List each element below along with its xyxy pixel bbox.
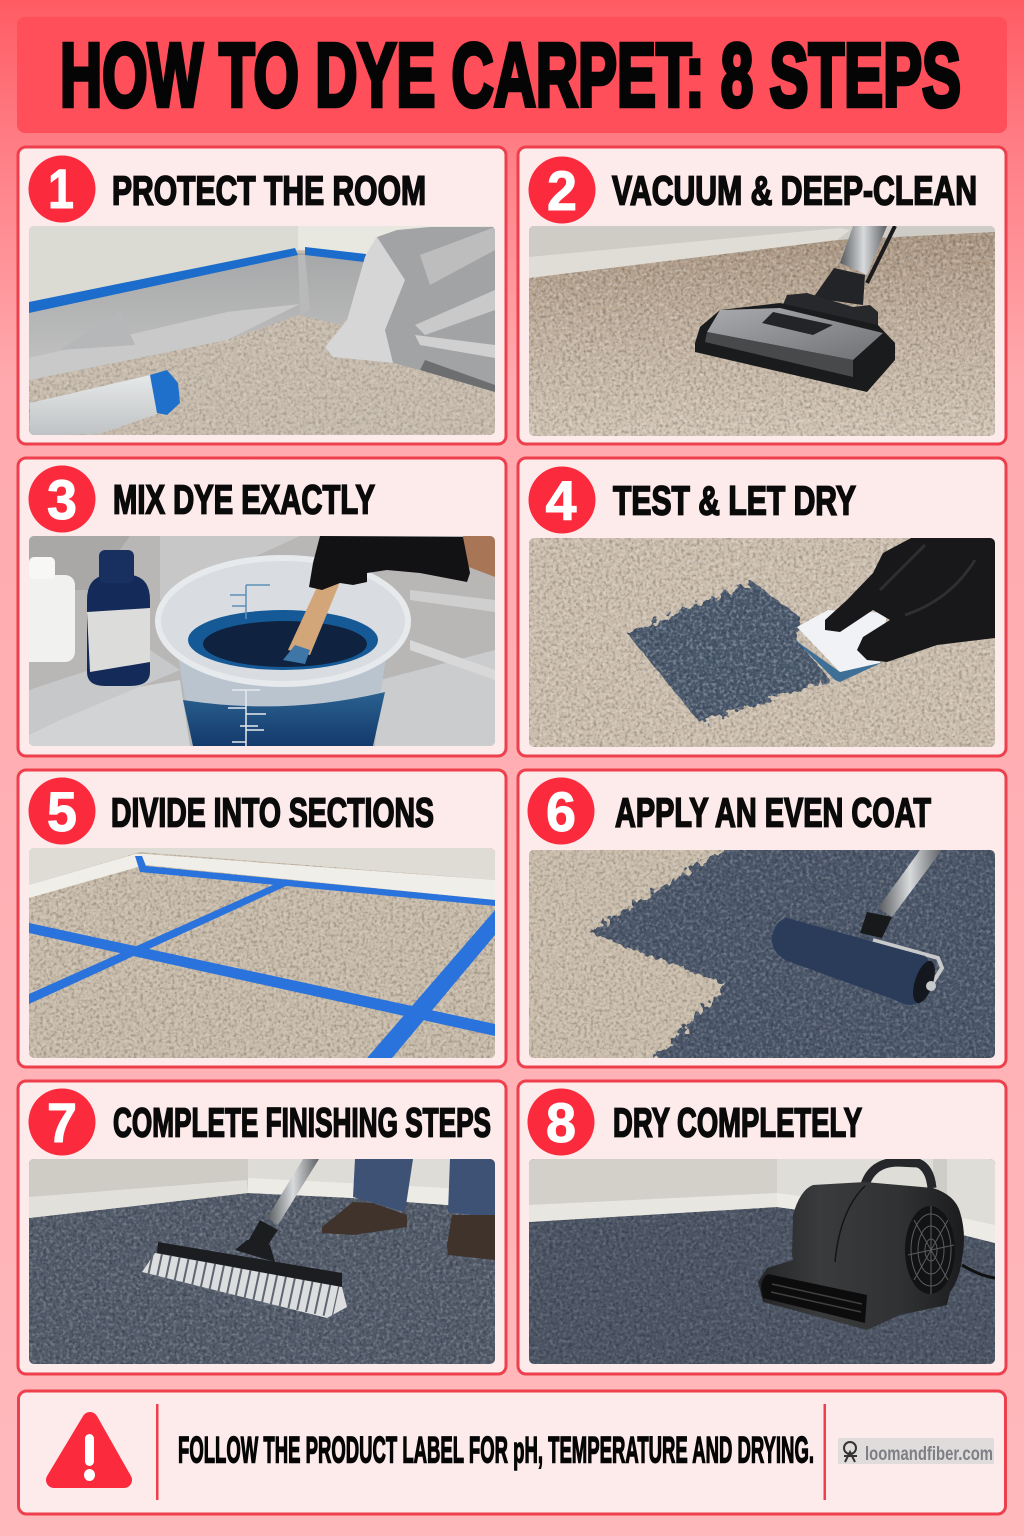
heading: complete finishing steps: COMPLETE FINISHING STEPS [113,1100,491,1146]
step number 7 [28,1088,96,1156]
photo: vacuum head on carpet [529,226,995,436]
step number 3: 3 [47,468,77,531]
figure legs with boots [322,1159,495,1260]
panel: step 2 vacuum and deep-clean [518,147,1006,444]
step number 4: 4 [546,469,576,532]
photo: brushing dyed carpet [29,1159,495,1364]
step number 1: 1 [48,157,74,220]
step number 6: 6 [546,780,576,843]
logo: loomandfiber.com: loomandfiber.com [865,1444,993,1465]
icon: paint roller [772,850,942,1006]
photo: masked room with plastic sheeting [29,226,495,436]
step number 6 [528,778,594,844]
step number 2: 2 [547,159,577,222]
step number 4 [528,466,596,534]
panel: step 4 test and let dry [518,458,1006,756]
panel: step 1 protect the room [18,147,506,444]
photo: taped carpet sections [29,848,495,1058]
panel: step 7 complete finishing steps [18,1081,506,1374]
logo: loomandfiber.com [838,1438,994,1465]
icon: scrub brush [142,1159,347,1318]
photo: air mover drying carpet [529,1159,995,1364]
step number 1 [28,156,96,222]
panel: step 6 apply an even coat [510,770,1006,1075]
heading: protect the room: PROTECT THE ROOM [112,168,426,214]
step number 7: 7 [47,1091,77,1154]
icon: vacuum cleaner [695,226,895,392]
heading: divide into sections: DIVIDE INTO SECTIONS [111,790,434,836]
panel: step 5 divide into sections [18,770,506,1067]
icon: sponge [795,610,887,682]
heading: test and let dry: TEST & LET DRY [613,478,856,524]
icon: wooden stir stick [283,583,340,664]
icon: black glove [825,537,995,662]
step number 8 [528,1088,594,1156]
icon: measuring bucket with blue dye [158,558,408,746]
photo: dye mixed in measuring bucket [20,536,495,746]
step number 5: 5 [47,780,77,843]
blue tape grid lines [29,856,495,1058]
icon: skin of forearm [463,536,495,577]
photo: test patch on carpet [529,537,995,747]
step number 3 [28,466,96,532]
icon: gloved hand [309,536,470,590]
step number 2 [528,156,596,224]
panel: step 8 dry completely [518,1081,1006,1374]
icon: warning triangle [54,1420,124,1481]
photo: roller applying dye [529,850,995,1058]
panel: warning footer [18,1391,1006,1514]
icon: air mover fan [758,1162,964,1330]
heading: mix dye exactly: MIX DYE EXACTLY [113,476,375,522]
icon: navy dye bottle [87,550,150,686]
icon: white bottle [29,557,75,662]
step number 8: 8 [546,1091,576,1154]
panel: step 3 mix dye exactly [18,458,506,756]
heading: dry completely: DRY COMPLETELY [613,1100,862,1146]
step number 5 [28,778,96,844]
